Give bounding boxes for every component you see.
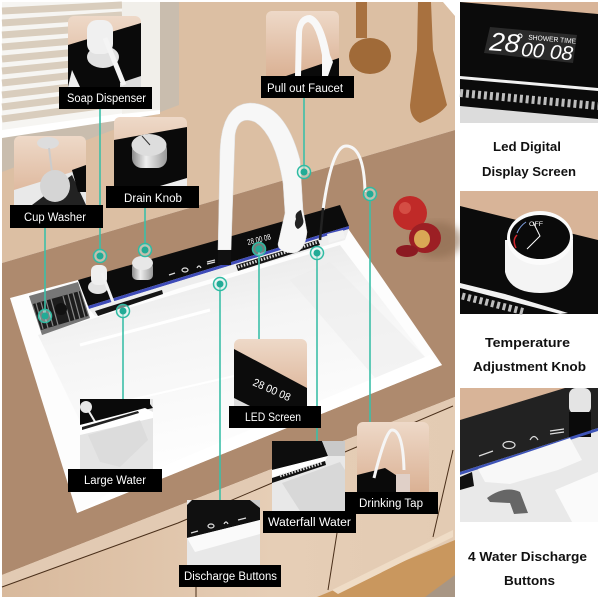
panel: temperature knob xyxy=(460,191,598,314)
panel: temperature knob: OFF xyxy=(529,221,543,228)
countertop xyxy=(2,130,455,575)
leader lines xyxy=(45,98,370,500)
callout: cup washer: Cup Washer xyxy=(24,212,86,224)
callout: pull out faucet: Pull out Faucet xyxy=(267,83,344,95)
callout: pull out faucet xyxy=(261,11,354,98)
caption: temperature knob xyxy=(473,335,586,374)
main faucet xyxy=(218,103,307,253)
cup washer tray xyxy=(29,282,90,335)
callout: discharge buttons xyxy=(179,500,281,587)
callout: LED screen: 28 00 08 xyxy=(251,377,292,404)
pomegranates xyxy=(393,196,462,258)
callout: waterfall water: Waterfall Water xyxy=(268,517,351,529)
caption: LED digital display xyxy=(482,139,576,179)
wall xyxy=(2,2,455,263)
callout: drinking tap xyxy=(345,422,438,514)
slot strip xyxy=(95,290,163,316)
callout: LED screen xyxy=(229,339,321,428)
caption: LED digital display: Display Screen xyxy=(482,164,576,179)
callout: drain knob: Drain Knob xyxy=(124,193,182,205)
top right corner cut xyxy=(443,2,455,16)
panel: LED digital display: 00 08 xyxy=(520,39,574,65)
connector stub xyxy=(195,587,197,597)
sink body xyxy=(10,227,442,513)
caption: temperature knob: Adjustment Knob xyxy=(473,359,586,374)
callout: drinking tap: Drinking Tap xyxy=(359,498,423,510)
callout: soap dispenser xyxy=(59,16,152,109)
panel: LED digital display: 28 xyxy=(487,26,522,59)
callout: large water: Large Water xyxy=(84,475,146,487)
panel: LED digital display: SHOWER TIME xyxy=(528,34,577,46)
caption: discharge buttons xyxy=(468,549,587,588)
soap dispenser xyxy=(88,265,113,302)
caption: discharge buttons: Buttons xyxy=(504,573,555,588)
callout: large water xyxy=(68,399,162,492)
panel icons xyxy=(169,260,215,275)
callout: soap dispenser: Soap Dispenser xyxy=(67,93,146,105)
sink basin xyxy=(38,245,425,487)
wooden spatula xyxy=(410,2,447,123)
caption: temperature knob: Temperature xyxy=(485,335,570,350)
callout: cup washer xyxy=(10,136,103,228)
black control panel xyxy=(78,205,349,306)
counter front edge and cabinet xyxy=(2,397,455,597)
panel: LED digital display xyxy=(460,2,598,123)
callout: discharge buttons: Discharge Buttons xyxy=(184,571,277,583)
wooden spoon xyxy=(349,2,391,74)
panel: kitchen scene xyxy=(2,2,462,597)
drain knob xyxy=(132,256,153,280)
caption: LED digital display: Led Digital xyxy=(493,139,561,154)
callout: drain knob xyxy=(106,117,199,208)
drinking tap xyxy=(320,146,365,243)
display readout: 28 00 08 xyxy=(246,232,272,247)
callout: waterfall water xyxy=(263,441,356,533)
callout: LED screen: LED Screen xyxy=(245,412,301,424)
hotspot markers xyxy=(38,166,376,322)
window with blinds xyxy=(2,2,179,172)
caption: discharge buttons: 4 Water Discharge xyxy=(468,549,587,564)
panel: discharge buttons xyxy=(460,388,598,522)
